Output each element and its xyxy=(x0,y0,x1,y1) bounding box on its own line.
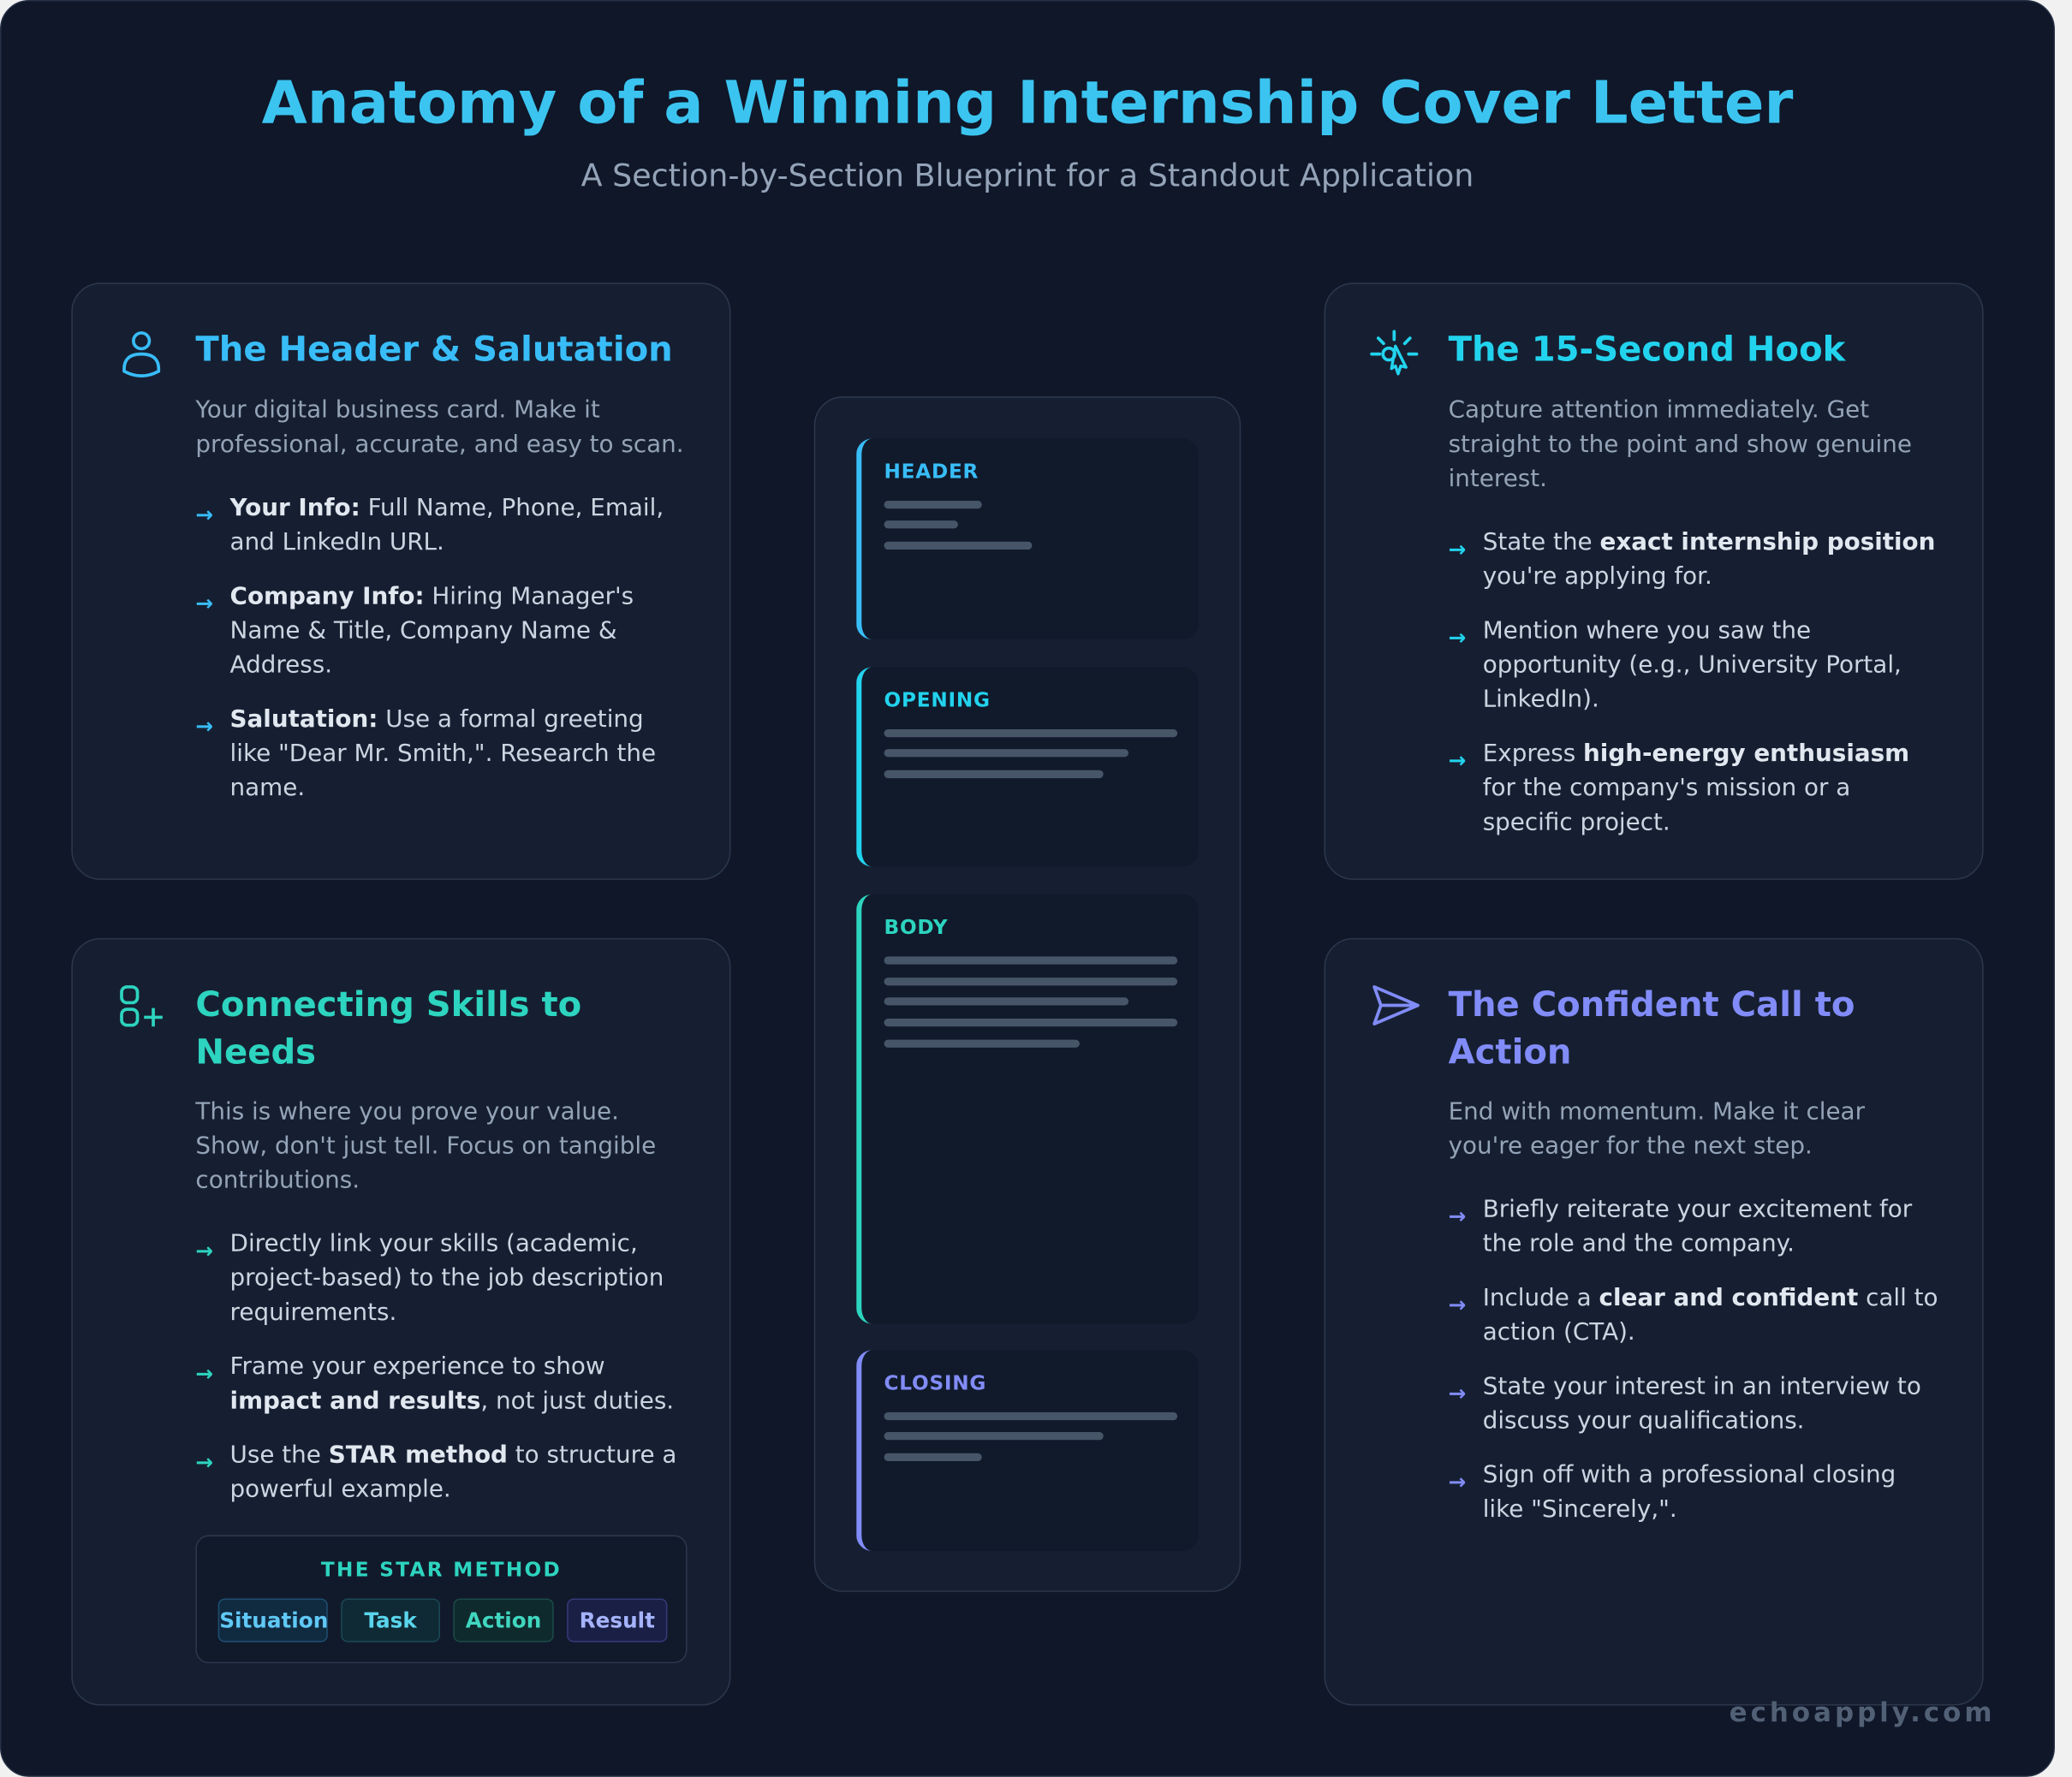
text block: → xyxy=(195,713,213,739)
text block: Your Info: Full Name, Phone, Email, and LinkedIn URL. xyxy=(230,494,664,556)
panel: letter diagram xyxy=(814,396,1241,1592)
text block: Capture attention immediately. Get straight to the point and show genuine interest. xyxy=(1449,396,1912,493)
text block: → xyxy=(1449,625,1466,650)
section: body: BODY xyxy=(884,916,948,939)
text block xyxy=(1449,1098,1938,1524)
text block: Mention where you saw the opportunity (e.g., University Portal, LinkedIn). xyxy=(1483,617,1902,713)
text block: End with momentum. Make it clear you're eager for the next step. xyxy=(1449,1098,1865,1160)
heading: The Confident Call to Action xyxy=(1449,985,1855,1073)
heading: The 15-Second Hook xyxy=(1449,330,1845,370)
panel: header & salutation xyxy=(71,282,731,880)
section: header xyxy=(856,438,1199,639)
watermark: echoapply.com xyxy=(1730,1697,1996,1728)
text block: This is where you prove your value. Show, don't just tell. Focus on tangible contributions. xyxy=(195,1098,656,1194)
section: body xyxy=(856,894,1199,1323)
text block: → xyxy=(1449,748,1466,773)
icon: click xyxy=(1370,330,1418,375)
text block: Frame your experience to show impact and results, not just duties. xyxy=(230,1352,674,1415)
section: header: HEADER xyxy=(884,460,979,484)
heading: Connecting Skills to Needs xyxy=(195,985,581,1073)
callout: STAR method: Action xyxy=(466,1608,541,1633)
panel: connecting skills xyxy=(71,938,731,1706)
text block: State the exact internship position you're applying for. xyxy=(1483,528,1935,591)
text block: Sign off with a professional closing like "Sincerely,". xyxy=(1483,1461,1896,1524)
text block: → xyxy=(1449,537,1466,562)
icon: blocks plus xyxy=(120,985,163,1027)
section: opening: OPENING xyxy=(884,688,991,712)
text block: → xyxy=(195,1238,213,1263)
text block xyxy=(195,396,684,802)
panel: call to action xyxy=(1324,938,1984,1706)
callout: STAR method xyxy=(195,1535,688,1663)
text block: Company Info: Hiring Manager's Name & Title, Company Name & Address. xyxy=(230,583,634,679)
text block: → xyxy=(195,1449,213,1474)
section: opening xyxy=(856,667,1199,866)
heading: The Header & Salutation xyxy=(195,330,673,370)
text block: Directly link your skills (academic, project-based) to the job description requirements. xyxy=(230,1230,664,1327)
text block: Include a clear and confident call to action (CTA). xyxy=(1483,1284,1938,1346)
text block xyxy=(195,1098,676,1503)
icon: send xyxy=(1372,985,1420,1025)
callout: STAR method: Task xyxy=(364,1608,417,1633)
callout: STAR method: Situation xyxy=(219,1608,328,1633)
panel: 15-second hook xyxy=(1324,282,1984,880)
text block: Briefly reiterate your excitement for the role and the company. xyxy=(1483,1196,1912,1257)
callout: STAR method: Result xyxy=(580,1608,655,1633)
text block: Use the STAR method to structure a powerful example. xyxy=(230,1441,676,1503)
callout: STAR method: THE STAR METHOD xyxy=(321,1558,562,1581)
section: closing: CLOSING xyxy=(884,1371,986,1395)
icon: person xyxy=(122,331,161,377)
text block: → xyxy=(195,502,213,527)
text block xyxy=(1449,396,1935,836)
text block: → xyxy=(195,1361,213,1386)
section: closing xyxy=(856,1350,1199,1551)
text block: → xyxy=(1449,1203,1466,1228)
text block: → xyxy=(1449,1469,1466,1495)
title: Anatomy of a Winning Internship Cover Letter xyxy=(262,70,1793,138)
text block: → xyxy=(1449,1381,1466,1406)
text block: → xyxy=(1449,1292,1466,1317)
subtitle: A Section-by-Section Blueprint for a Standout Application xyxy=(581,157,1474,194)
text block: State your interest in an interview to discuss your qualifications. xyxy=(1483,1373,1921,1435)
text block: Your digital business card. Make it professional, accurate, and easy to scan. xyxy=(195,396,684,459)
text block: → xyxy=(195,591,213,615)
text block: Salutation: Use a formal greeting like "Dear Mr. Smith,". Research the name. xyxy=(230,705,656,802)
text block: Express high-energy enthusiasm for the company's mission or a specific project. xyxy=(1483,740,1909,836)
